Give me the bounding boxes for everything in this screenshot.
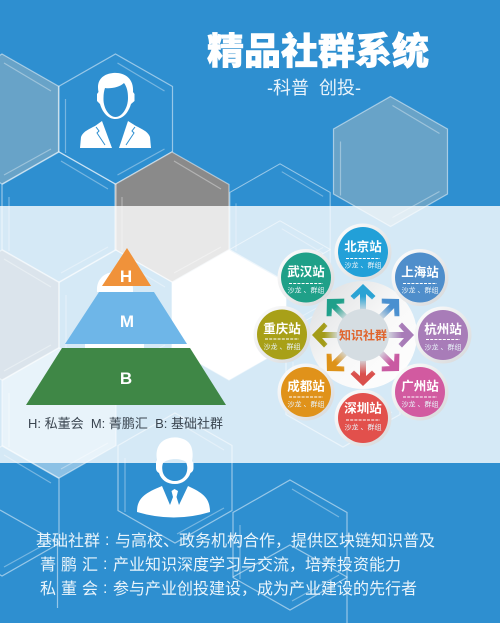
station: 北京站: 北京站 (344, 239, 382, 254)
icon: person top (80, 73, 151, 148)
line: 菁鹏汇: : (103, 556, 107, 573)
line: 私董会: 董 (61, 580, 77, 598)
pyramid tier M: M (120, 312, 134, 331)
station: 重庆站: 沙龙 、群组 (264, 342, 300, 351)
station: 广州站: 沙龙 、群组 (402, 400, 438, 408)
station: 成都站: 沙龙 、群组 (288, 400, 324, 408)
pyramid tier M (65, 292, 187, 344)
line: 菁鹏汇: 产业知识深度学习与交流，培养投资能力 (113, 556, 401, 574)
central label (337, 309, 389, 361)
central disc (309, 281, 417, 389)
central label: 知识社群 (339, 328, 387, 342)
description text (36, 532, 435, 598)
pyramid (26, 248, 226, 405)
station: 深圳站: 深圳站 (344, 400, 382, 416)
station: 重庆站 (254, 306, 310, 363)
station: 上海站 (392, 249, 448, 306)
station: 重庆站: 重庆站 (263, 321, 301, 336)
pyramid tier H (102, 248, 151, 286)
station: 上海站: 上海站 (401, 264, 439, 280)
arrows (312, 284, 414, 386)
station: 北京站: 沙龙 、群组 (345, 260, 381, 270)
line: 私董会: 参与产业创投建设，成为产业建设的先行者 (113, 580, 417, 598)
line: 菁鹏汇: 鹏 (61, 556, 77, 574)
station: 上海站: 沙龙 、群组 (402, 286, 438, 294)
line: 基础社群: 基础社群 (36, 532, 100, 550)
pyramid tier B: B (120, 369, 132, 388)
station: 广州站 (392, 364, 448, 420)
station: 武汉站: 沙龙 、群组 (288, 286, 324, 294)
station: 杭州站: 沙龙 、群组 (425, 342, 461, 352)
line: 私董会: 私 (40, 580, 56, 598)
station: 武汉站 (278, 249, 334, 306)
line: 菁鹏汇: 菁 (40, 556, 56, 574)
pyramid tier B (26, 348, 226, 405)
station: 深圳站 (334, 390, 392, 446)
line: 私董会: 会 (82, 580, 98, 598)
subtitle: -科普 创投- (267, 78, 361, 98)
station: 杭州站: 杭州站 (424, 322, 462, 336)
line: 基础社群: 与高校、政务机构合作，提供区块链知识普及 (115, 532, 435, 550)
station: 深圳站: 沙龙 、群组 (345, 422, 381, 432)
station: 武汉站: 武汉站 (287, 264, 325, 279)
line: 基础社群: : (105, 532, 109, 549)
pyramid tier H: H (120, 267, 132, 286)
station: 杭州站 (414, 306, 472, 364)
title: 精品社群系统 (207, 30, 429, 72)
station: 北京站 (334, 224, 392, 280)
station: 成都站: 成都站 (287, 378, 325, 394)
icon: person bottom (137, 437, 210, 518)
station: 成都站 (278, 364, 334, 420)
line: 私董会: : (103, 580, 107, 597)
light band (0, 206, 500, 463)
pyramid legend: H: 私董会 M: 菁鹏汇 B: 基础社群 (28, 416, 223, 431)
station: 广州站: 广州站 (401, 378, 439, 394)
line: 菁鹏汇: 汇 (82, 556, 98, 574)
hub diagram (254, 224, 472, 446)
white figure behind pyramid (85, 272, 144, 348)
